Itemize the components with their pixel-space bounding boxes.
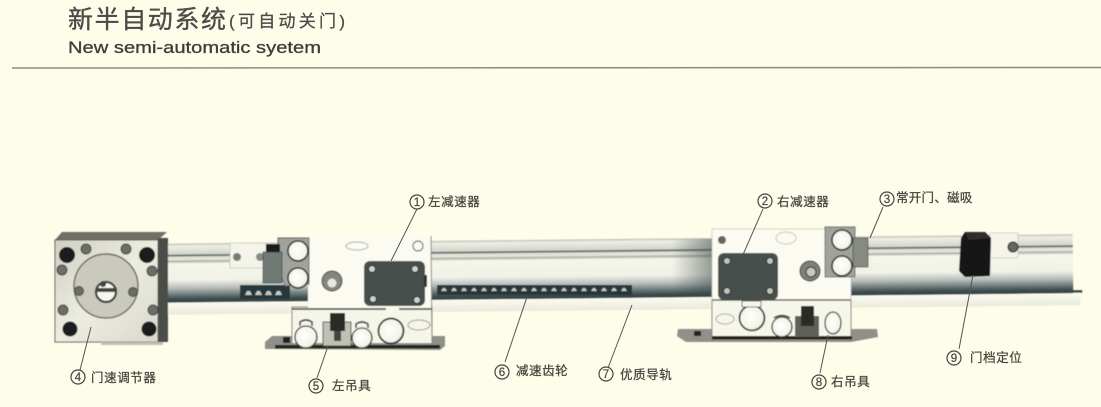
left carriage	[263, 236, 445, 350]
title	[68, 6, 345, 34]
label 9: door stop position: 9	[951, 353, 957, 365]
speed regulator block	[55, 232, 168, 345]
label 1: left damper	[410, 194, 480, 209]
label 2: right damper	[758, 194, 829, 209]
label 2: right damper: 右减速器	[777, 194, 829, 209]
label 6: reduction gear: 减速齿轮	[516, 364, 568, 378]
label 8: right hanger: 右吊具	[831, 374, 870, 389]
leader lines	[80, 207, 973, 378]
left damper plate	[364, 261, 427, 306]
door stop	[959, 232, 1018, 277]
label 5: left hanger: 左吊具	[332, 378, 371, 393]
title: (可自动关门)	[229, 12, 345, 31]
label 5: left hanger: 5	[313, 381, 319, 393]
right damper plate	[718, 253, 778, 300]
label 7: quality rail: 优质导轨	[620, 368, 672, 382]
label 7: quality rail: 7	[603, 369, 609, 381]
label 4: speed regulator: 4	[75, 372, 82, 384]
door operator assembly	[55, 227, 1082, 350]
label 6: reduction gear: 6	[499, 367, 505, 379]
label 5: left hanger	[309, 378, 371, 393]
label 9: door stop position	[947, 350, 1022, 365]
label 1: left damper: 1	[414, 197, 420, 209]
label 1: left damper: 左减速器	[428, 194, 480, 209]
label 2: right damper: 2	[762, 196, 768, 208]
label 7: quality rail	[599, 367, 672, 382]
rack gear	[240, 285, 632, 299]
subtitle: New semi-automatic syetem	[68, 38, 321, 57]
label 8: right hanger	[812, 374, 870, 389]
label 3: hold-open magnet: 常开门、磁吸	[896, 190, 973, 205]
left stop tab	[230, 243, 266, 268]
guide rail	[165, 234, 1082, 315]
label 3: hold-open magnet: 3	[884, 194, 890, 206]
label 9: door stop position: 门档定位	[970, 350, 1022, 365]
right carriage	[677, 227, 878, 342]
label 4: speed regulator: 门速调节器	[91, 370, 157, 385]
label 6: reduction gear	[495, 364, 568, 379]
label 8: right hanger: 8	[816, 377, 822, 389]
title: 新半自动系统	[68, 6, 226, 34]
